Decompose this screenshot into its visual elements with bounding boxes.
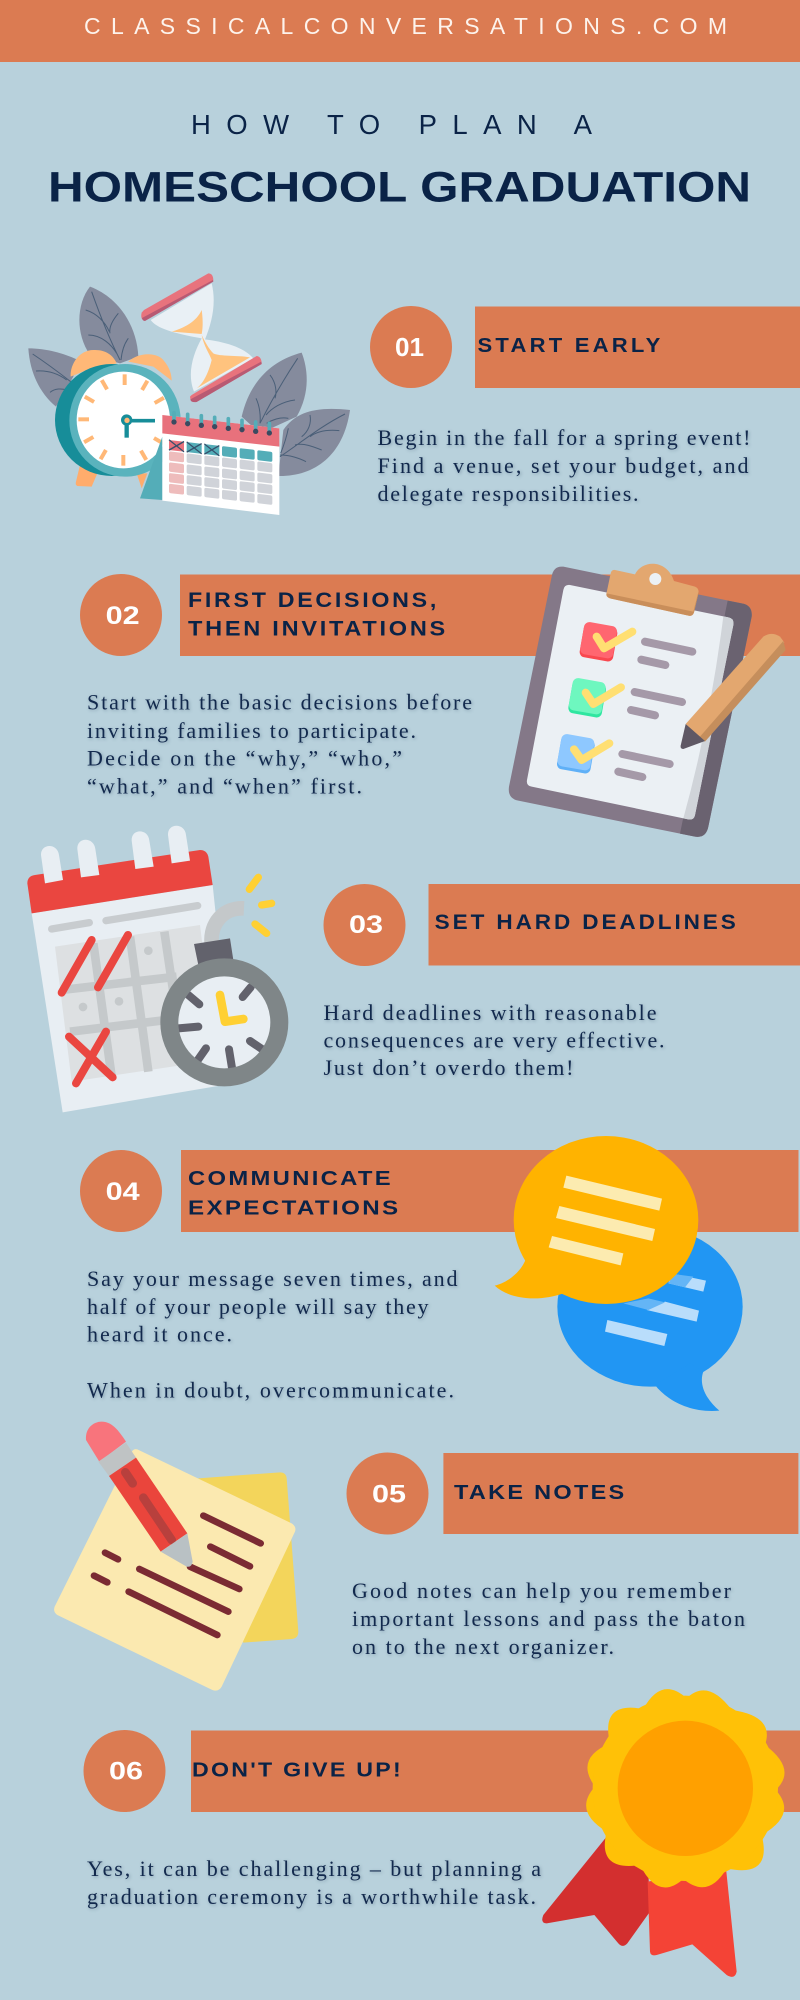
icon: calendar with bomb clock: [27, 826, 279, 1112]
number badge 01: 01: [395, 332, 424, 362]
clip: [606, 564, 699, 616]
body text 04: When in doubt, overcommunicate.: [87, 1378, 454, 1403]
heading bar 01: START EARLY: [478, 334, 664, 357]
body text 05: on to the next organizer.: [352, 1634, 614, 1659]
checkbox green: [567, 677, 621, 718]
blue bubble: [557, 1227, 743, 1411]
heading bar 04: EXPECTATIONS: [188, 1196, 400, 1219]
body text 04: [87, 1266, 458, 1403]
icon: clipboard checklist: [509, 564, 786, 837]
title line 1: HOW TO PLAN A: [191, 109, 593, 140]
number badge 01: [370, 306, 452, 388]
body text 06: graduation ceremony is a worthwhile task.: [87, 1884, 536, 1909]
hourglass: [141, 273, 262, 402]
number badge 05: [346, 1452, 428, 1534]
yellow bubble: [495, 1136, 698, 1304]
panel: step 05: [54, 1422, 798, 1691]
calendar page: [27, 826, 233, 1112]
pencil: [86, 1422, 193, 1567]
body text 06: [87, 1856, 541, 1909]
body text 02: “what,” and “when” first.: [87, 774, 362, 798]
heading bar 02: [180, 574, 800, 656]
body text 05: [352, 1578, 745, 1659]
heading bar 01: [475, 306, 800, 388]
body text 03: Hard deadlines with reasonable: [324, 1000, 656, 1025]
body text 05: important lessons and pass the baton: [352, 1606, 745, 1631]
heading bar 02: FIRST DECISIONS,: [188, 588, 439, 612]
body text 01: [378, 425, 750, 506]
body text 05: Good notes can help you remember: [352, 1578, 732, 1603]
leaves: [28, 287, 350, 476]
number badge 04: [80, 1150, 162, 1232]
sparks: [249, 877, 272, 933]
heading bar 04: COMMUNICATE: [188, 1167, 393, 1190]
pencil: [681, 634, 786, 749]
body text 02: Start with the basic decisions before: [87, 690, 472, 714]
header band: [0, 0, 800, 62]
body text 04: heard it once.: [87, 1322, 232, 1347]
body text 01: Begin in the fall for a spring event!: [378, 425, 750, 450]
number badge 06: 06: [109, 1758, 143, 1786]
heading bar 02: THEN INVITATIONS: [188, 616, 448, 640]
heading bar 04: [181, 1150, 798, 1232]
checkbox blue: [556, 733, 609, 774]
panel: step 03: [27, 826, 800, 1112]
heading bar 06: [191, 1730, 800, 1812]
heading bar 05: TAKE NOTES: [454, 1481, 626, 1504]
title line 2: HOMESCHOOL GRADUATION: [48, 164, 751, 212]
number badge 03: [324, 884, 406, 966]
number badge 04: 04: [106, 1178, 140, 1206]
panel: step 06: [84, 1689, 800, 1977]
heading bar 06: DON'T GIVE UP!: [192, 1758, 403, 1782]
body text 03: [324, 1000, 664, 1080]
body text 02: inviting families to participate.: [87, 718, 416, 743]
number badge 02: 02: [106, 602, 140, 630]
body text 02: Decide on the “why,” “who,”: [87, 746, 402, 770]
heading bar 03: SET HARD DEADLINES: [435, 911, 739, 934]
title: [48, 109, 751, 212]
body text 03: Just don’t overdo them!: [324, 1055, 574, 1080]
panel: step 04: [80, 1136, 798, 1411]
panel: step 01: [28, 273, 800, 515]
body text 04: Say your message seven times, and: [87, 1266, 458, 1291]
body text 02: [87, 690, 472, 798]
number badge 05: 05: [372, 1481, 406, 1509]
icon: speech bubbles: [495, 1136, 743, 1411]
heading bar 05: [443, 1453, 798, 1534]
number badge 06: [84, 1730, 166, 1812]
body text 04: half of your people will say they: [87, 1294, 428, 1319]
body text 01: delegate responsibilities.: [378, 481, 638, 506]
website address: CLASSICALCONVERSATIONS.COM: [84, 13, 727, 39]
wall calendar: [140, 413, 279, 515]
icon: clock, hourglass and calendar: [28, 273, 350, 515]
icon: award rosette: [542, 1689, 785, 1977]
heading bar 03: [428, 884, 800, 966]
body text 03: consequences are very effective.: [324, 1028, 664, 1052]
body text 01: Find a venue, set your budget, and: [378, 453, 748, 478]
body text 06: Yes, it can be challenging – but planning a: [87, 1856, 541, 1881]
icon: sticky notes and pencil: [54, 1422, 298, 1691]
checkbox red: [579, 621, 632, 662]
alarm clock: [55, 350, 181, 488]
panel: step 02: [80, 564, 800, 837]
number badge 02: [80, 574, 162, 656]
number badge 03: 03: [349, 911, 383, 939]
bomb clock: [169, 908, 279, 1077]
